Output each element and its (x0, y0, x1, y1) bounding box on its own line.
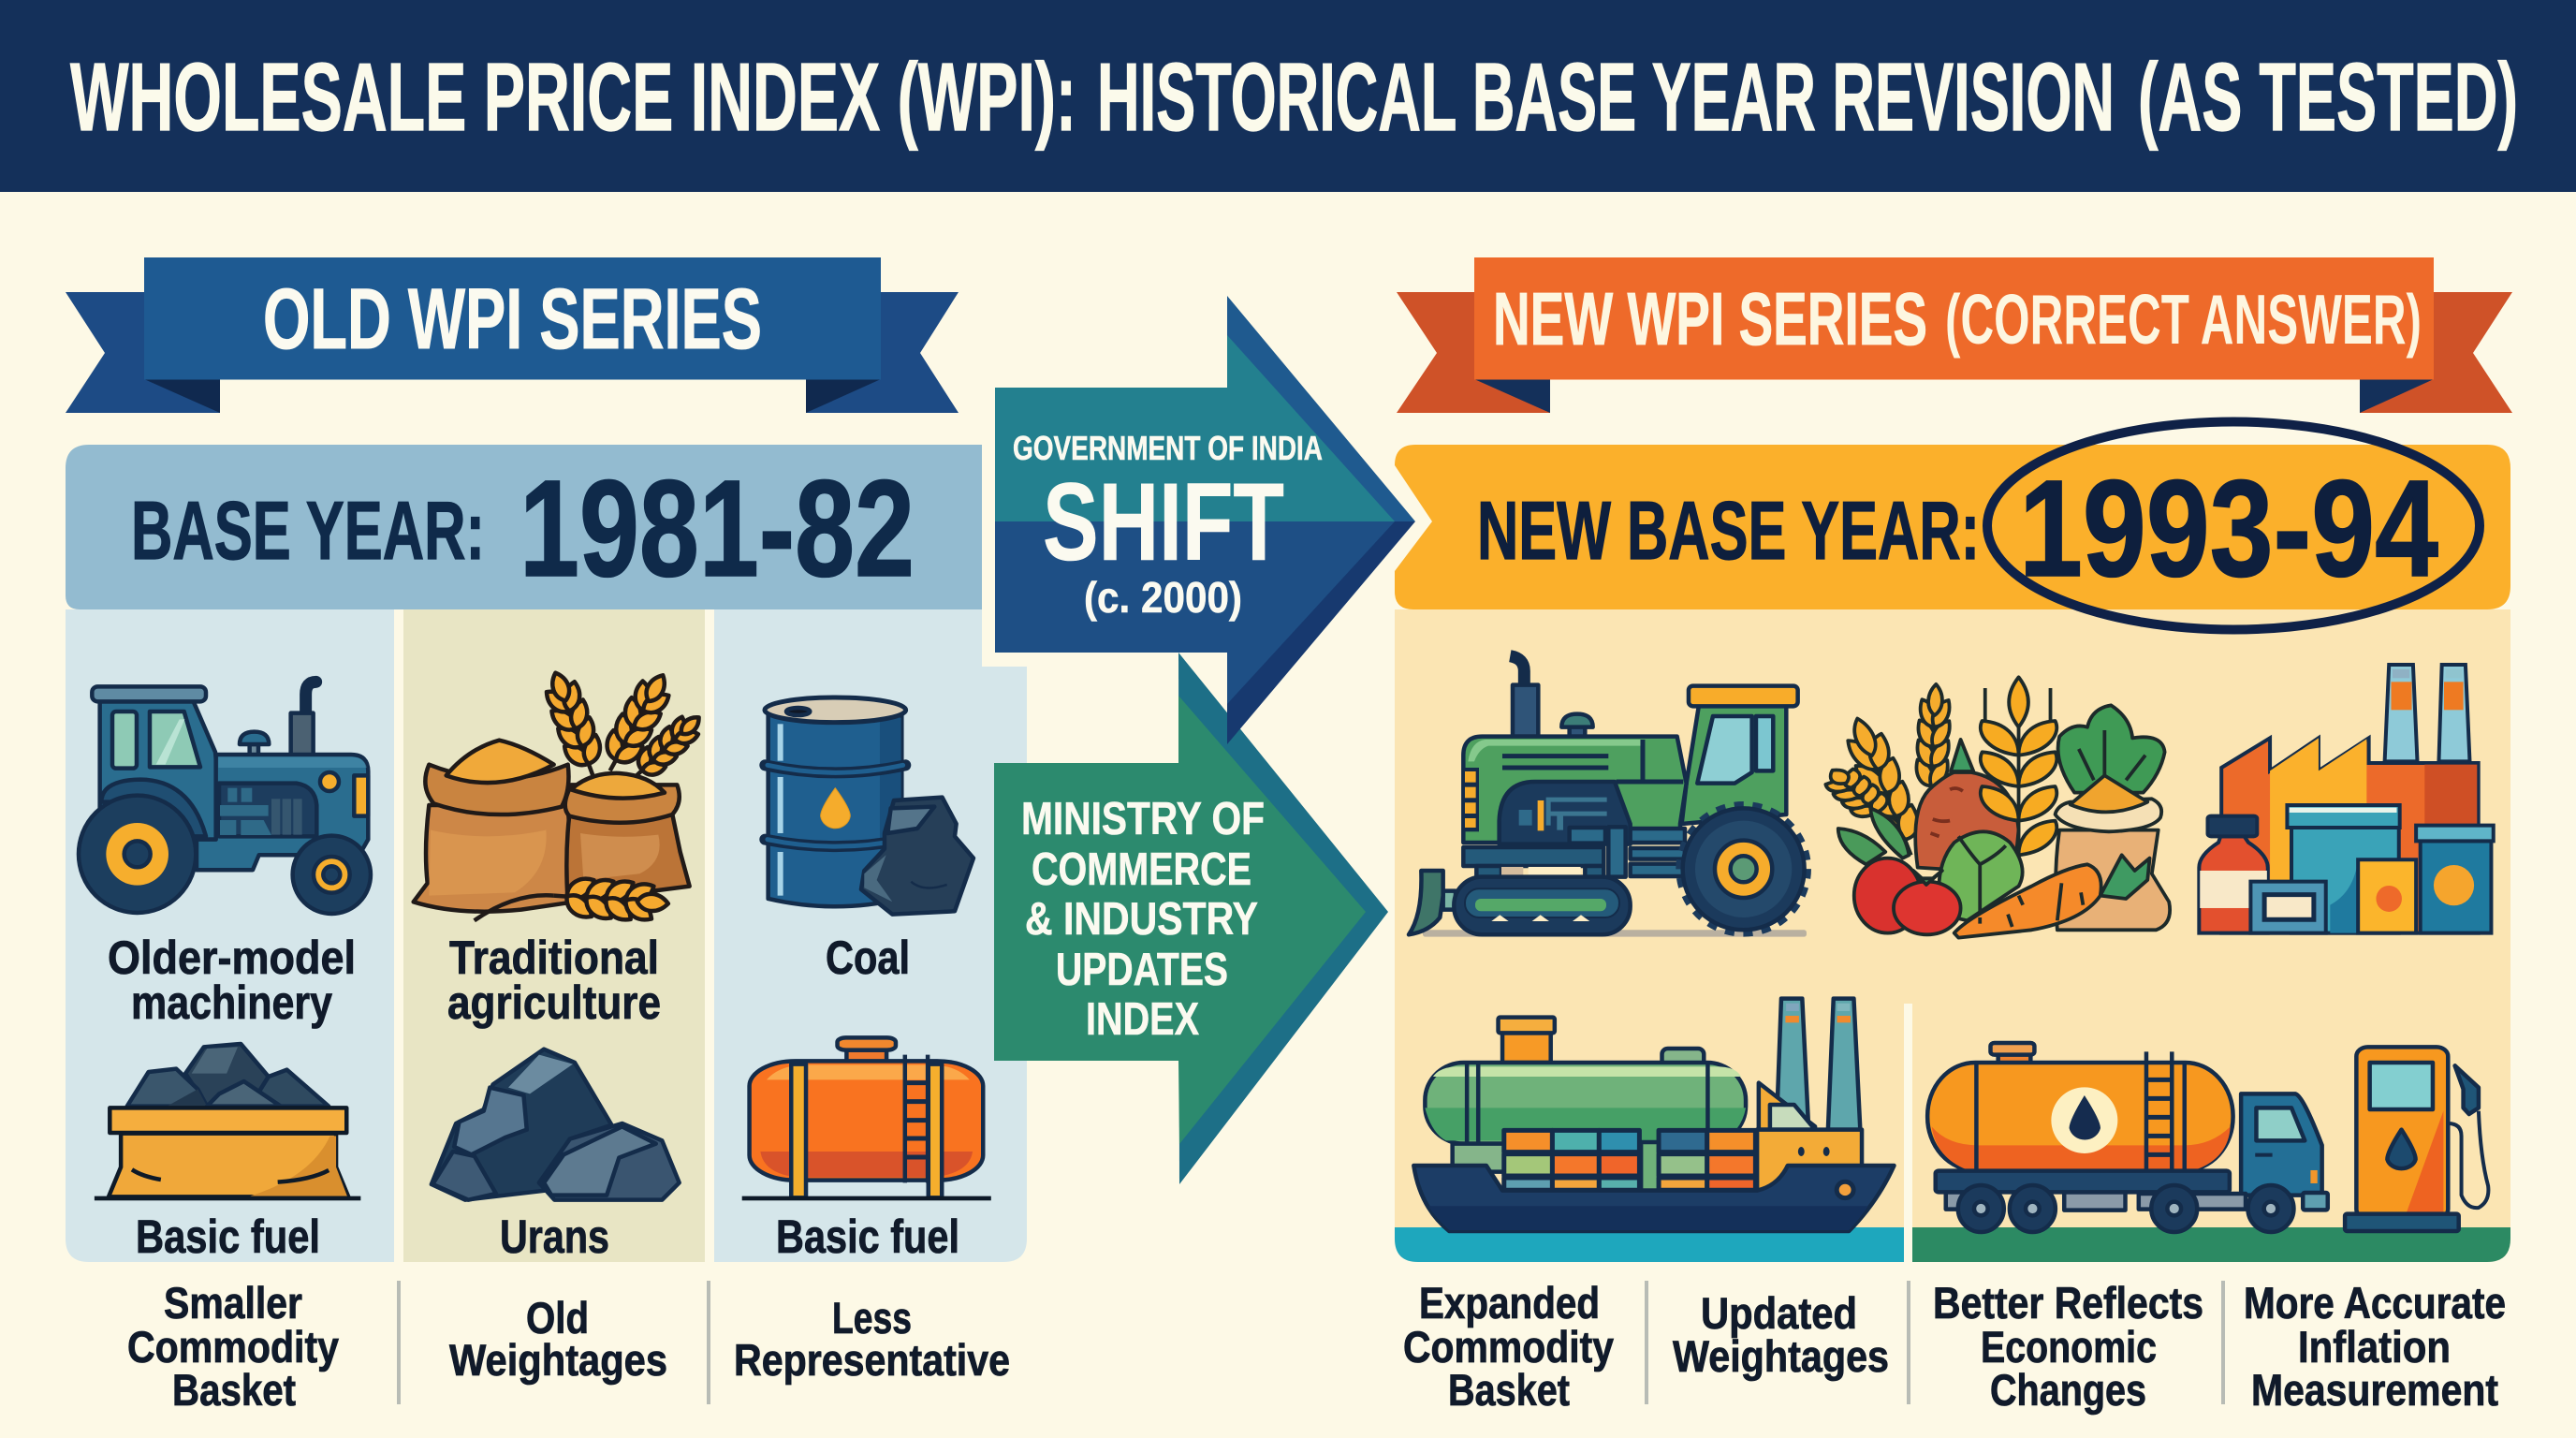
arrow: Ministry of Commerce & Industry updates index: INDEX (1086, 994, 1199, 1045)
base year box: 1981-82: BASE YEAR: (131, 484, 485, 577)
base year box: 1993-94 (1395, 421, 2510, 629)
arrow: Government of India shift: SHIFT (1043, 461, 1284, 584)
caption: smaller commodity basket: Basket (172, 1365, 296, 1415)
ribbon banner: new WPI series: NEW WPI SERIES (1493, 277, 1927, 360)
icon: older-model tractor (79, 682, 371, 914)
text: older-model machinery: Older-model (108, 932, 356, 984)
icon: oil barrel and coal (765, 697, 973, 915)
caption: expanded commodity basket: Expanded (1419, 1278, 1600, 1328)
icon: fuel pump (2345, 1047, 2488, 1231)
divider inside new panel (1904, 1004, 1912, 1262)
caption: updated weightages: Weightages (1673, 1331, 1889, 1381)
caption: more accurate inflation measurement: Measurement (2251, 1365, 2498, 1415)
base year box: 1981-82: 1981-82 (520, 452, 915, 606)
caption: more accurate inflation measurement: More Accurate (2244, 1278, 2506, 1328)
caption: better reflects economic changes (1933, 1278, 2203, 1415)
caption: more accurate inflation measurement (2244, 1278, 2506, 1415)
arrow: Ministry of Commerce & Industry updates index (994, 653, 1388, 1184)
arrow: Ministry of Commerce & Industry updates index: & INDUSTRY (1025, 894, 1258, 945)
caption: smaller commodity basket: Commodity (127, 1322, 339, 1372)
caption: expanded commodity basket: Commodity (1403, 1322, 1614, 1372)
text: coal: Coal (826, 932, 910, 984)
panel: old WPI series (66, 257, 1027, 1263)
arrow: Government of India shift (995, 296, 1415, 744)
title bar: WHOLESALE PRICE INDEX (WPI): (70, 43, 1076, 151)
base year box: 1993-94: NEW BASE YEAR: (1477, 484, 1980, 577)
text: traditional agriculture: agriculture (447, 976, 661, 1029)
arrow: Government of India shift: (c. 2000) (1084, 573, 1242, 622)
caption: better reflects economic changes: Changes (1990, 1365, 2146, 1415)
arrow: Ministry of Commerce & Industry updates index: MINISTRY OF (1021, 794, 1265, 844)
icon: grain sacks and wheat (414, 664, 711, 929)
base year box: 1993-94: 1993-94 (2019, 452, 2438, 606)
icon: green tractor with dozer blade (1409, 656, 1808, 937)
ribbon banner: old WPI series: OLD WPI SERIES (263, 271, 762, 367)
text: traditional agriculture: Traditional (449, 932, 659, 984)
caption: better reflects economic changes: Economic (1981, 1322, 2157, 1372)
column backgrounds (66, 609, 1027, 1262)
caption: smaller commodity basket (127, 1278, 339, 1415)
caption: old weightages: Old (526, 1293, 589, 1343)
icon: mixed agriculture produce (1811, 677, 2170, 938)
caption: expanded commodity basket: Basket (1448, 1365, 1570, 1415)
caption: old weightages (449, 1293, 667, 1385)
text: basic fuel: Basic fuel (136, 1211, 320, 1263)
ribbon banner: new WPI series (1397, 257, 2512, 413)
icon: orange fuel tank (742, 1037, 991, 1200)
icon: factory and consumer goods (2199, 665, 2494, 933)
new series captions (1403, 1278, 2506, 1415)
text: basic fuel second: Basic fuel (776, 1211, 959, 1263)
caption: expanded commodity basket (1403, 1278, 1614, 1415)
caption: updated weightages: Updated (1701, 1288, 1857, 1338)
panel: new WPI series (1395, 257, 2512, 1262)
caption: more accurate inflation measurement: Inflation (2298, 1322, 2451, 1372)
water strip (1395, 1227, 1904, 1262)
caption: old weightages: Weightages (449, 1335, 667, 1385)
ground strip (1912, 1227, 2510, 1262)
panel body background (1395, 609, 2510, 1262)
old series captions (127, 1278, 1010, 1415)
caption: less representative (734, 1293, 1010, 1385)
arrow: Ministry of Commerce & Industry updates index: UPDATES (1056, 945, 1228, 995)
icon: rocks (432, 1049, 680, 1200)
icon: coal basket (95, 1044, 360, 1200)
title bar (0, 0, 2576, 192)
caption: better reflects economic changes: Better Reflects (1933, 1278, 2203, 1328)
text: urans: Urans (500, 1211, 609, 1263)
caption: less representative: Less (832, 1293, 912, 1343)
arrow: Ministry of Commerce & Industry updates index: COMMERCE (1032, 844, 1251, 895)
caption: updated weightages (1673, 1288, 1889, 1381)
arrow: Government of India shift: GOVERNMENT OF INDIA (1013, 429, 1323, 467)
text: traditional agriculture (447, 932, 661, 1029)
icon: fuel tanker truck (1927, 1043, 2328, 1232)
base year box: 1981-82 (66, 445, 982, 609)
ribbon banner: old WPI series (66, 257, 959, 413)
text: older-model machinery (108, 932, 356, 1029)
caption: smaller commodity basket: Smaller (164, 1278, 302, 1328)
caption: less representative: Representative (734, 1335, 1010, 1385)
text: older-model machinery: machinery (131, 976, 332, 1029)
icon: cargo ship with tank (1413, 999, 1894, 1231)
